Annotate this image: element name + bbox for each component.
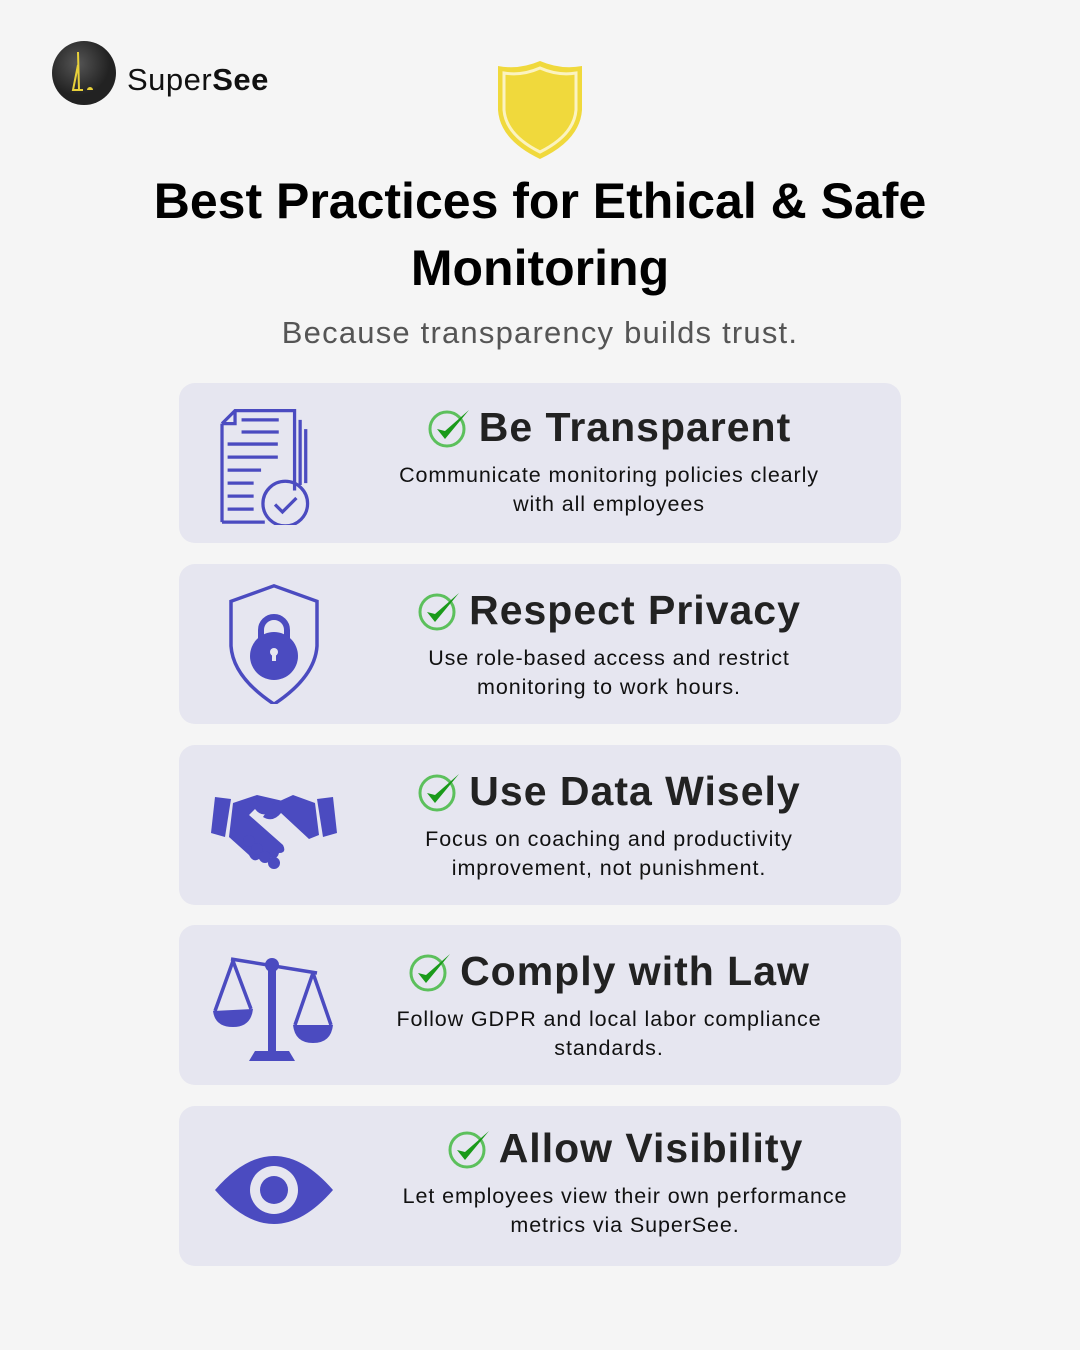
heading: Allow Visibility bbox=[499, 1124, 803, 1170]
panel: use data wisely: Focus on coaching and productivity bbox=[425, 827, 793, 851]
subtitle: Because transparency builds trust. bbox=[282, 315, 798, 350]
panel: use data wisely: improvement, not punishment. bbox=[452, 856, 766, 880]
panel: allow visibility bbox=[179, 1106, 901, 1266]
icon: handshake bbox=[211, 795, 337, 869]
panel: respect privacy: monitoring to work hours. bbox=[477, 675, 741, 699]
icon: shield lock bbox=[229, 584, 319, 704]
heading: Comply with Law bbox=[460, 948, 810, 994]
icon: eye bbox=[215, 1156, 333, 1224]
panel: comply with law bbox=[179, 925, 901, 1085]
panel: be transparent bbox=[179, 383, 901, 543]
panel: allow visibility: metrics via SuperSee. bbox=[510, 1213, 740, 1237]
icon: yellow shield bbox=[498, 61, 582, 159]
panel: respect privacy: Use role-based access and restrict bbox=[428, 646, 790, 670]
title: Monitoring bbox=[411, 240, 669, 296]
panel: respect privacy bbox=[179, 564, 901, 724]
heading: Use Data Wisely bbox=[469, 768, 801, 814]
icon: document bbox=[220, 409, 310, 525]
logo bbox=[52, 41, 269, 105]
title bbox=[154, 173, 926, 296]
heading: Be Transparent bbox=[479, 404, 791, 450]
panel: be transparent: with all employees bbox=[513, 492, 705, 516]
heading: Respect Privacy bbox=[469, 586, 801, 632]
panel: be transparent: Communicate monitoring policies clearly bbox=[399, 463, 819, 487]
panel: allow visibility: Let employees view their own performance bbox=[403, 1184, 847, 1208]
panel: use data wisely bbox=[179, 745, 901, 905]
panel: comply with law: Follow GDPR and local labor compliance bbox=[397, 1007, 821, 1031]
icon: scales bbox=[213, 957, 333, 1061]
panel: comply with law: standards. bbox=[554, 1036, 664, 1060]
logo: SuperSee bbox=[127, 62, 269, 97]
title: Best Practices for Ethical & Safe bbox=[154, 173, 926, 229]
